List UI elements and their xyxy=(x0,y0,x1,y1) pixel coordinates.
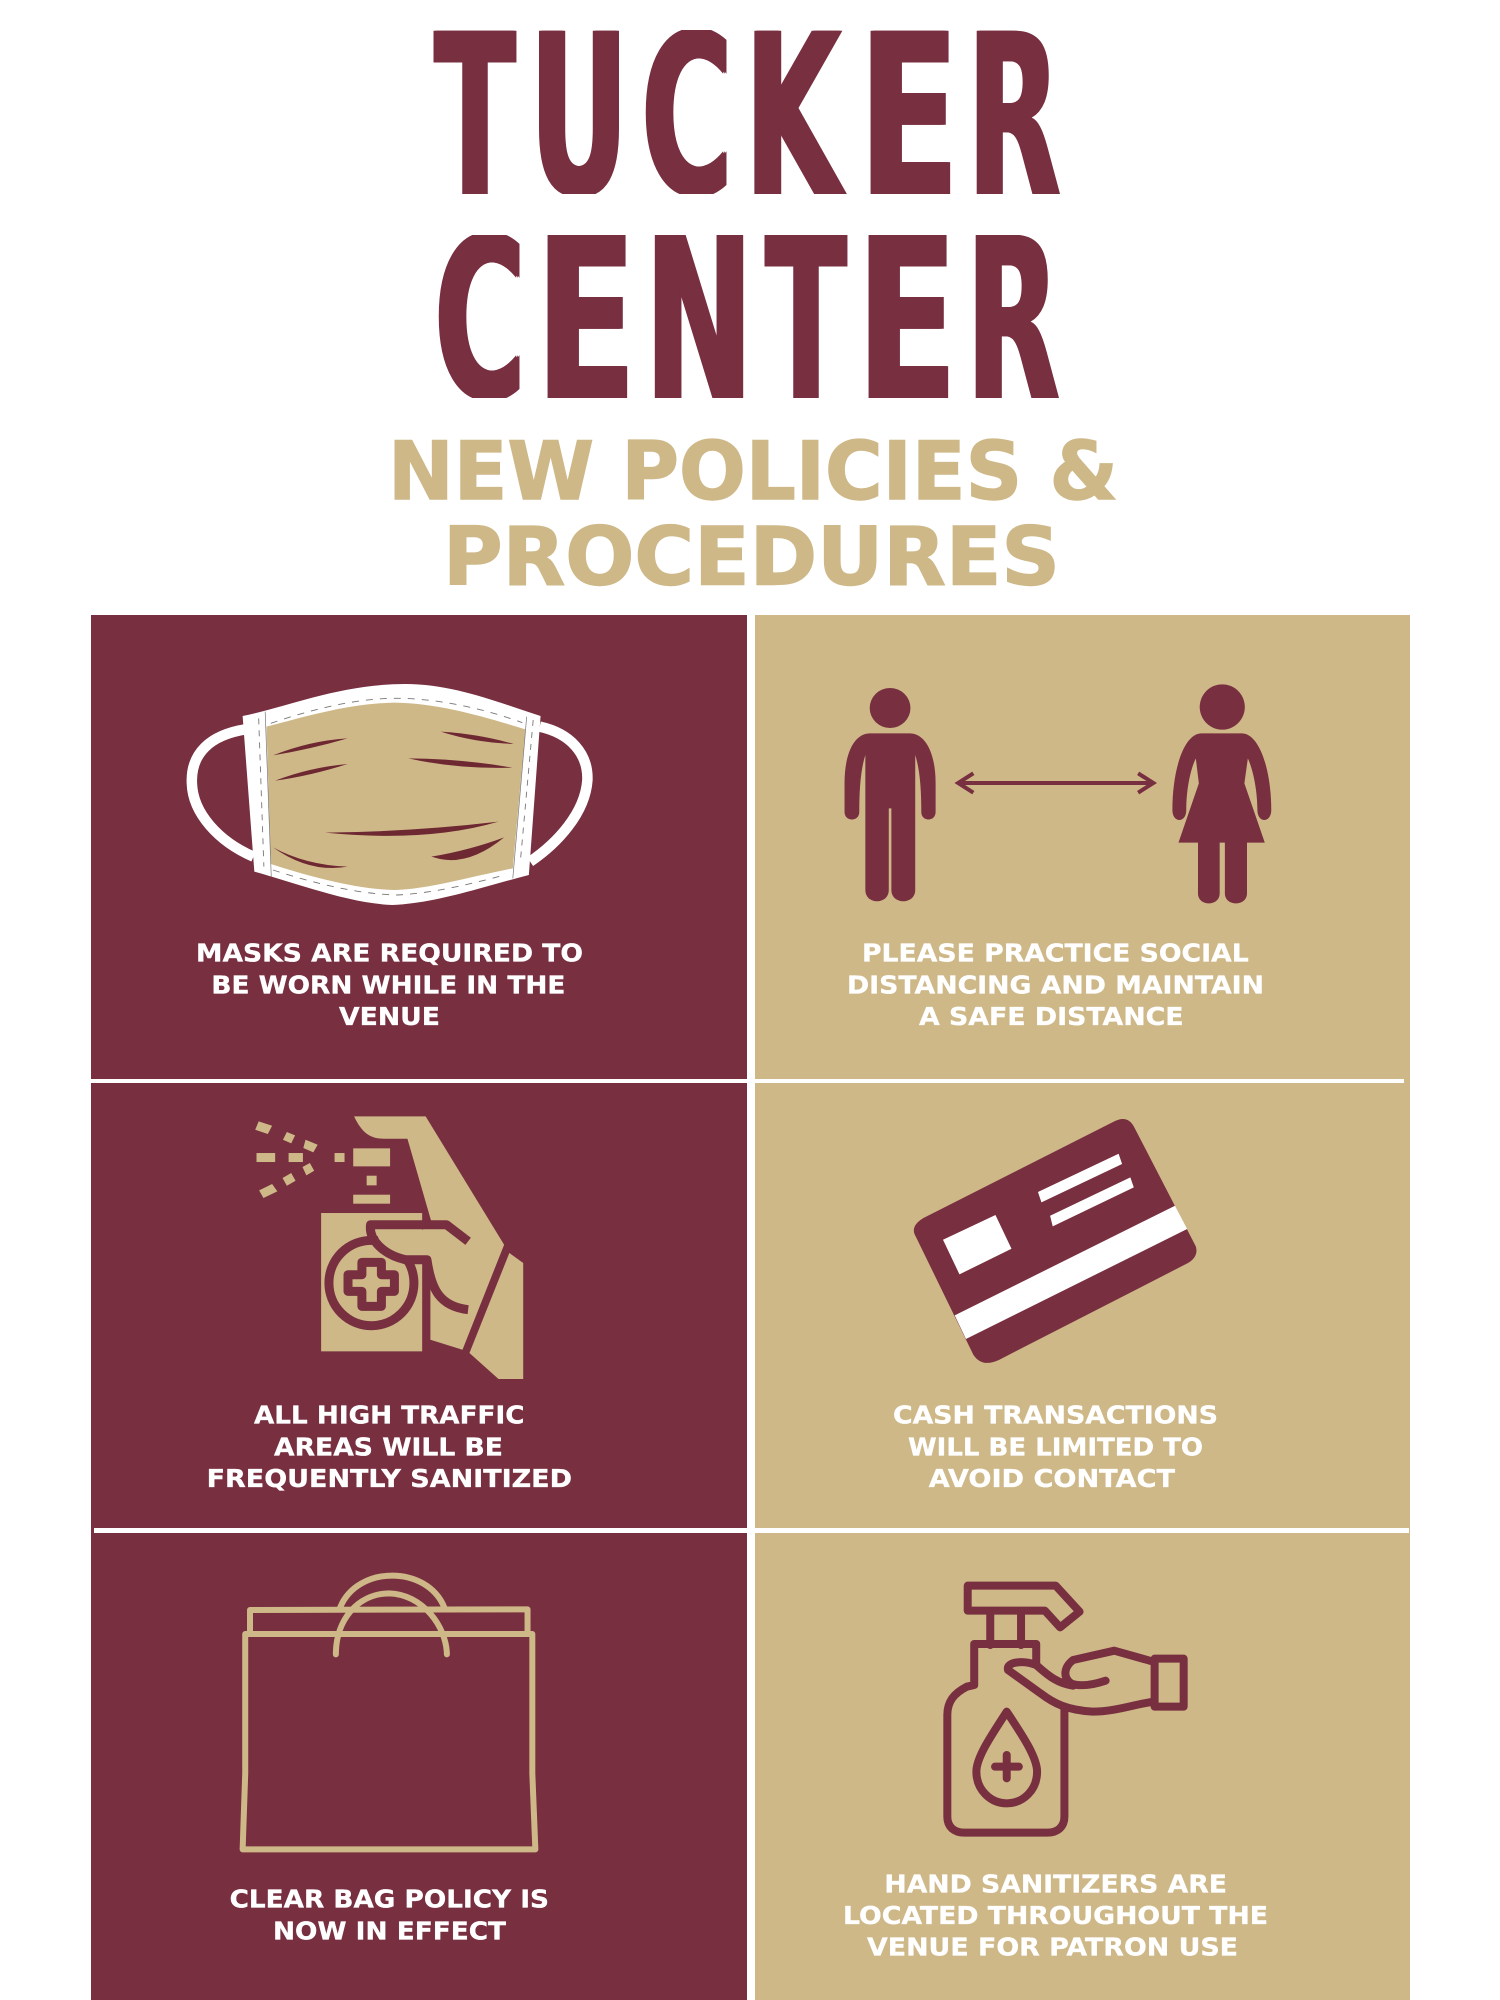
caption: cash xyxy=(893,1401,1218,1493)
caption: clear bag xyxy=(230,1884,549,1946)
caption: hand sanitizers xyxy=(843,1869,1268,1961)
caption: cash: CASH TRANSACTIONS xyxy=(893,1401,1218,1430)
caption: cash: AVOID CONTACT xyxy=(929,1464,1175,1493)
caption: masks: MASKS ARE REQUIRED TO xyxy=(196,939,583,968)
caption: sanitized: ALL HIGH TRAFFIC xyxy=(254,1401,524,1430)
caption: social distancing: A SAFE DISTANCE xyxy=(919,1002,1184,1031)
caption: clear bag: NOW IN EFFECT xyxy=(273,1917,506,1946)
caption: social distancing: PLEASE PRACTICE SOCIAL xyxy=(862,939,1249,968)
icon: face mask xyxy=(192,684,587,905)
caption: hand sanitizers: HAND SANITIZERS ARE xyxy=(884,1869,1227,1898)
panel: hand sanitizers xyxy=(843,1582,1268,1961)
caption: sanitized: FREQUENTLY SANITIZED xyxy=(207,1464,572,1493)
title: Tucker Center xyxy=(434,30,1061,398)
icon: two people with distance arrow xyxy=(845,684,1271,903)
icon: shopping bag outline xyxy=(243,1576,535,1849)
subtitle: New Policies & Procedures xyxy=(388,430,1118,595)
caption: masks: BE WORN WHILE IN THE xyxy=(211,970,565,999)
panel: masks required xyxy=(186,684,593,1031)
caption: social distancing xyxy=(847,939,1264,1031)
panel: clear bag policy xyxy=(230,1572,549,1946)
icon: hand under sanitizer pump bottle xyxy=(947,1586,1184,1833)
caption: masks xyxy=(196,939,583,1031)
icon: credit card xyxy=(914,1119,1196,1363)
caption: hand sanitizers: LOCATED THROUGHOUT THE xyxy=(843,1901,1268,1930)
panel: cash transactions xyxy=(893,1119,1218,1493)
caption: sanitized: AREAS WILL BE xyxy=(274,1433,503,1462)
panel: sanitized areas xyxy=(207,1116,572,1493)
caption: social distancing: DISTANCING AND MAINTAIN xyxy=(847,970,1264,999)
icon: hand pressing spray bottle xyxy=(255,1117,523,1379)
caption: cash: WILL BE LIMITED TO xyxy=(908,1433,1203,1462)
panel: social distancing xyxy=(844,684,1272,1031)
caption: hand sanitizers: VENUE FOR PATRON USE xyxy=(867,1932,1238,1961)
caption: clear bag: CLEAR BAG POLICY IS xyxy=(230,1884,549,1913)
caption: sanitized xyxy=(207,1401,572,1493)
caption: masks: VENUE xyxy=(339,1002,440,1031)
